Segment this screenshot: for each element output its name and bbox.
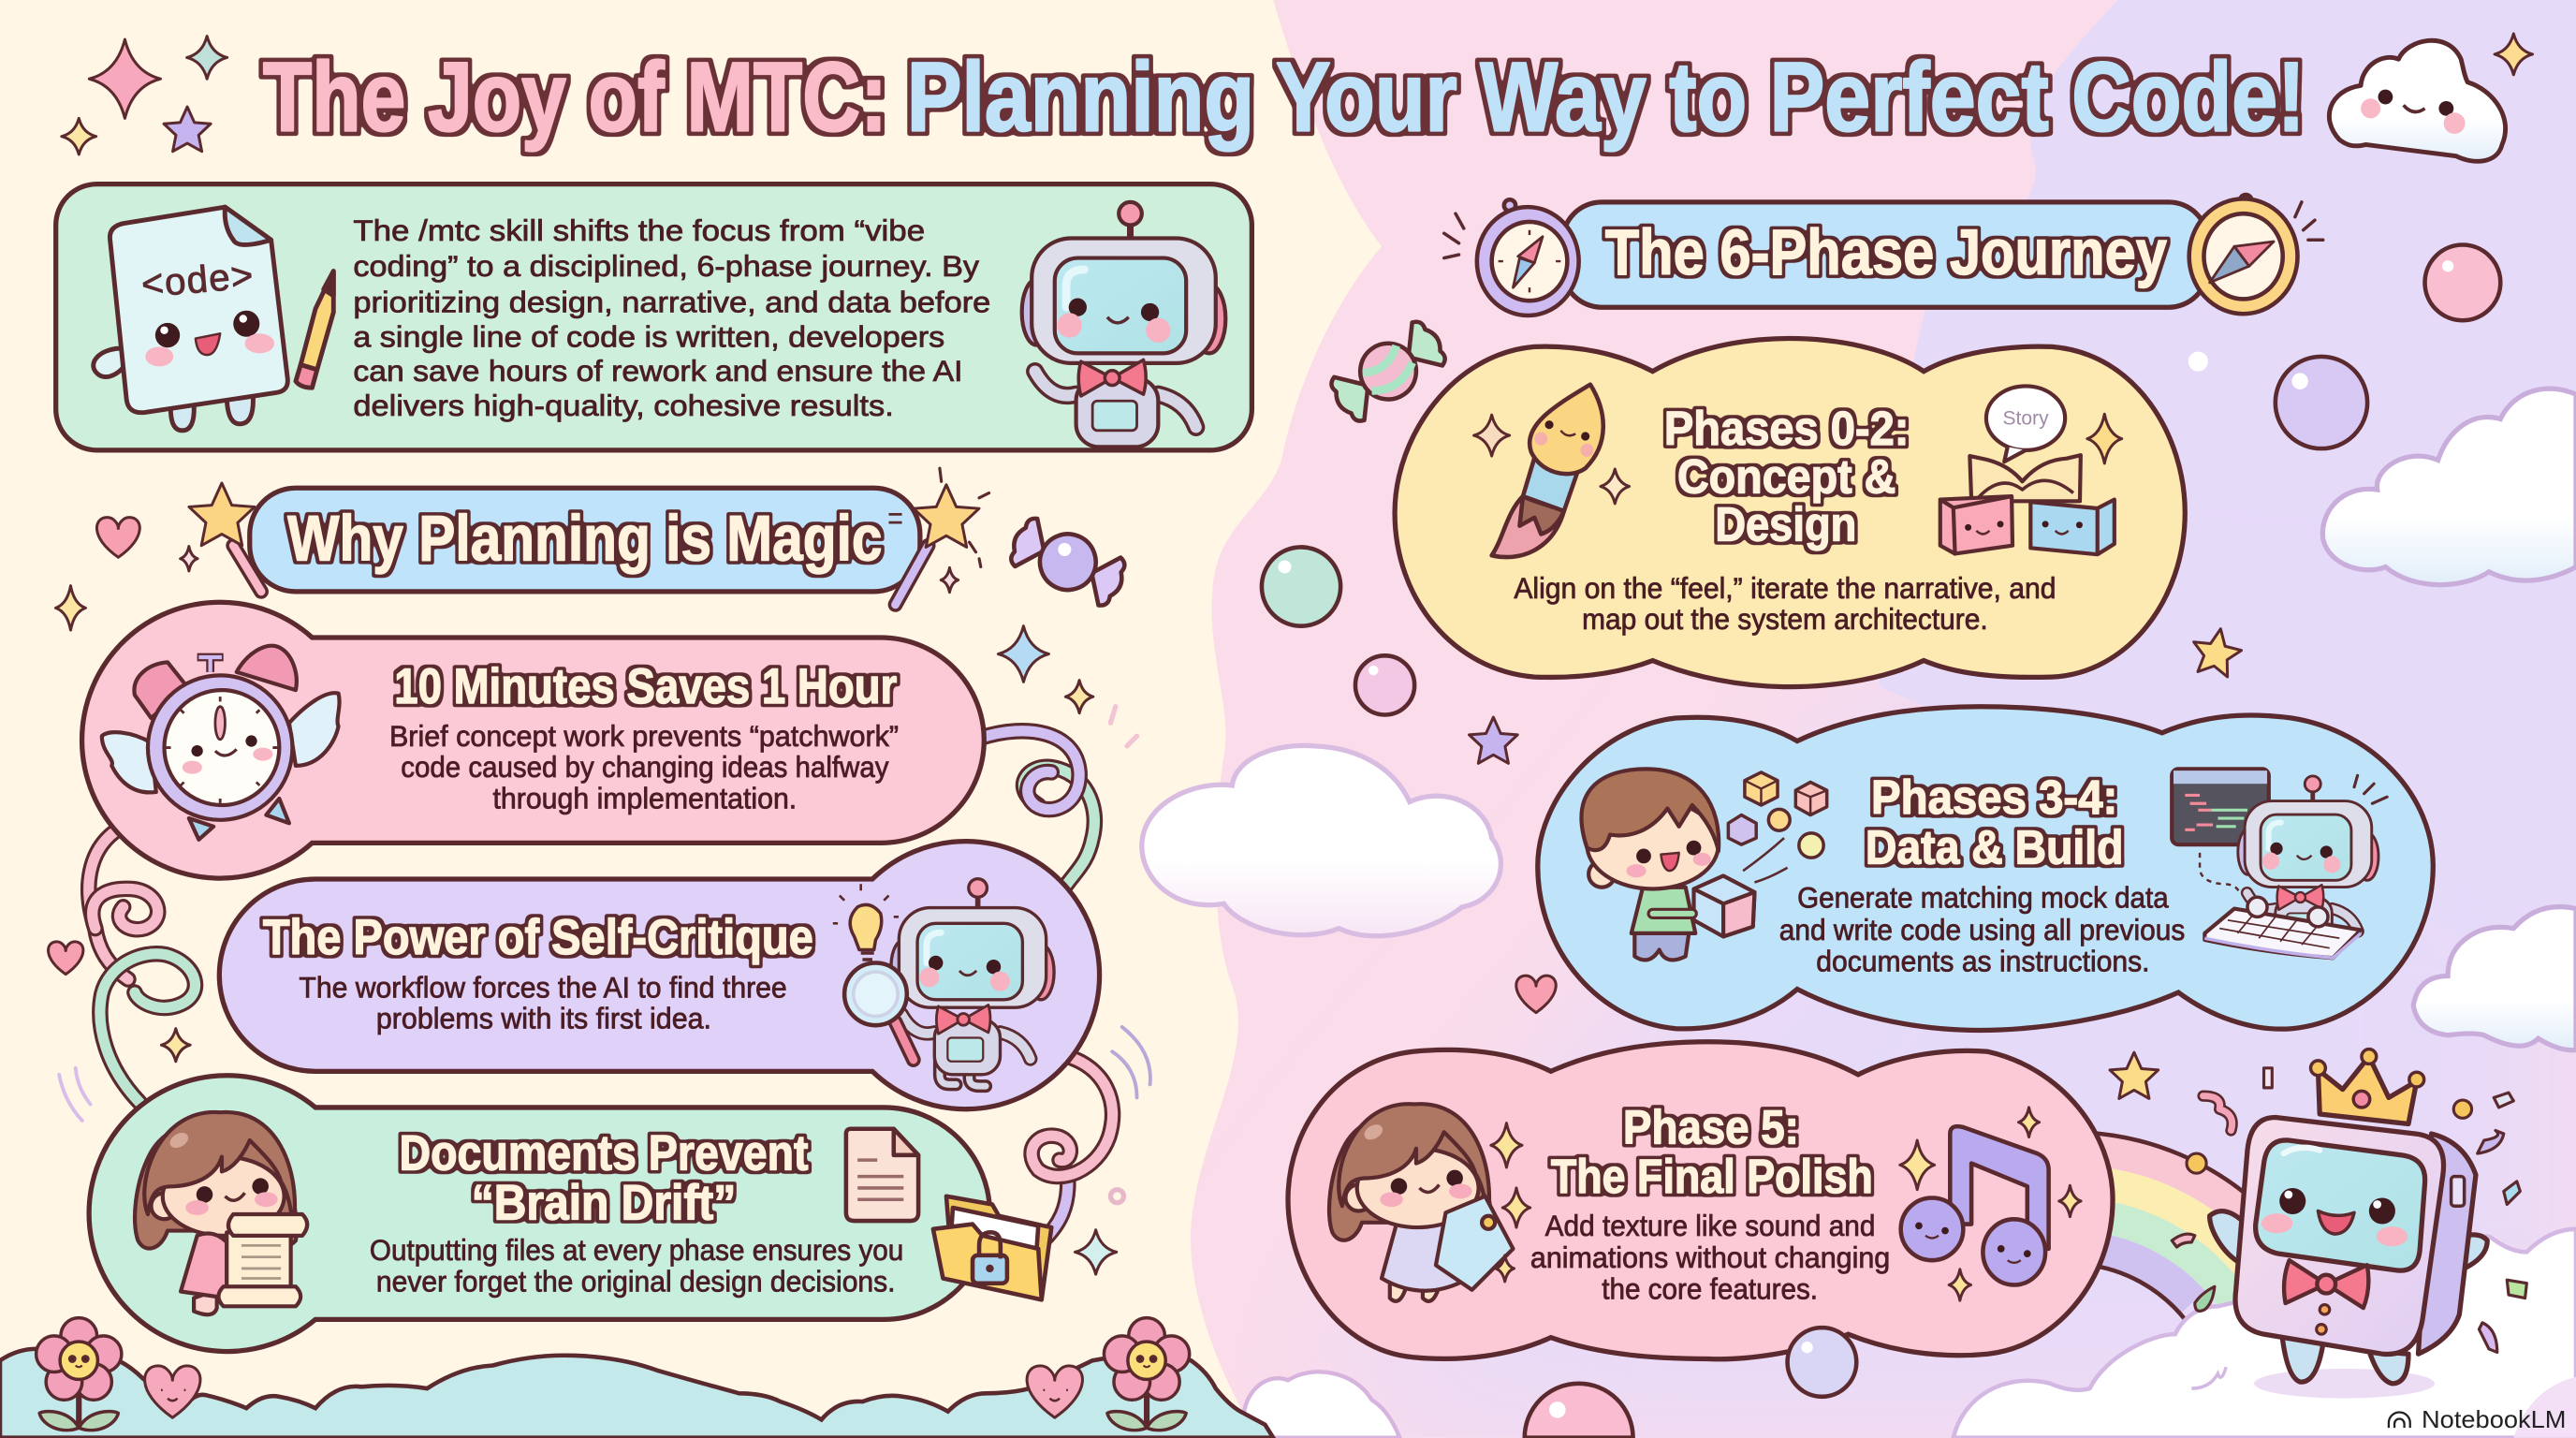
- phase title: [1866, 770, 2123, 873]
- phase title: The Final Polish: [1551, 1150, 1873, 1203]
- card text: Brief concept work prevents “patchwork”: [389, 719, 899, 753]
- title: The Joy of MTC:: [263, 43, 887, 153]
- icon: right flower: [1104, 1318, 1190, 1431]
- decorations: left column: [49, 518, 1150, 1274]
- confetti: [2172, 1068, 2526, 1352]
- heading pill: Why Planning is Magic: Why Planning is Magic: [287, 502, 882, 574]
- icon: robot at keyboard: [2204, 775, 2387, 958]
- panel: 10 Minutes Saves 1 Hour: [82, 602, 984, 878]
- icon: right compass: [2189, 195, 2323, 314]
- icon: document: [846, 1129, 918, 1221]
- icon: left heart: [145, 1366, 200, 1417]
- card text: [389, 719, 899, 815]
- phase text: map out the system architecture.: [1582, 602, 1988, 636]
- white dot: [2188, 352, 2208, 372]
- bubbles: [1262, 245, 2500, 1438]
- phase title: Phase 5:: [1623, 1101, 1799, 1154]
- icon: story book and boxes: Story: [2002, 408, 2049, 430]
- phase title: Design: [1715, 497, 1856, 550]
- phase text: the core features.: [1602, 1271, 1818, 1305]
- phase title: [1551, 1101, 1873, 1203]
- icon: paintbrush: [1474, 385, 1630, 557]
- phase text: animations without changing: [1530, 1240, 1890, 1274]
- cloud: right: [2322, 389, 2576, 585]
- icon: green candy: [1324, 315, 1453, 428]
- rainbow: [2086, 1133, 2259, 1319]
- crown: [2318, 1057, 2417, 1123]
- icon: crowned mascot device: [2172, 1049, 2526, 1399]
- icon: left flower: [37, 1318, 122, 1431]
- phase text: Align on the “feel,” iterate the narrative, and: [1514, 571, 2056, 605]
- card text: Outputting files at every phase ensures you: [370, 1233, 903, 1267]
- heading pill: The 6-Phase Journey: [1562, 202, 2208, 307]
- icon: floating data cubes: [1728, 772, 1827, 882]
- panel: Phases 0-2 Concept and Design: [1395, 339, 2185, 687]
- icon: code document character: <ode>: [139, 253, 255, 306]
- card text: [299, 970, 787, 1035]
- phase title: Concept &: [1677, 450, 1895, 504]
- connector swirls: left column: [89, 731, 1113, 1240]
- intro text: can save hours of rework and ensure the AI: [353, 354, 962, 388]
- phase text: documents as instructions.: [1816, 944, 2150, 977]
- heading pill: Why Planning is Magic: [250, 488, 920, 592]
- card text: code caused by changing ideas halfway: [401, 750, 889, 784]
- cloud: bottom right: [1954, 1229, 2576, 1438]
- icon: lightbulb: [833, 884, 899, 960]
- icon: winged alarm clock: [102, 646, 340, 840]
- icon: robot waving: [1022, 202, 1225, 447]
- card title: Documents Prevent: [399, 1126, 809, 1181]
- icon: story book and boxes: [1940, 386, 2122, 554]
- card title: [399, 1126, 809, 1230]
- panel: Phase 5 The Final Polish: [1288, 1042, 2113, 1359]
- phase text: Generate matching mock data: [1797, 881, 2169, 915]
- icon: left compass: [1444, 199, 1579, 315]
- phase title: [1664, 402, 1909, 550]
- card text: [370, 1233, 903, 1299]
- card title: The Power of Self-Critique: [263, 910, 813, 965]
- intro text: The /mtc skill shifts the focus from “vibe: [353, 213, 925, 247]
- icon: left wand: [189, 483, 261, 592]
- panel: intro: [56, 184, 1251, 450]
- phase text: [1530, 1209, 1890, 1305]
- decorations: title sparkles: [62, 34, 2533, 154]
- icon: smiling cloud: [2329, 40, 2506, 161]
- panel: Documents Prevent Brain Drift: [89, 1076, 1051, 1352]
- intro text: a single line of code is written, developers: [353, 319, 944, 353]
- icon: boy with data cube: [1582, 769, 1754, 960]
- bottom hills: [0, 1349, 1273, 1438]
- icon: girl with scroll: [135, 1112, 307, 1314]
- icon: purple candy: [1004, 512, 1132, 611]
- bubble over Phase 5 panel: [1788, 1328, 1856, 1397]
- icon: code terminal window: [2172, 769, 2269, 892]
- card text: problems with its first idea.: [376, 1002, 711, 1035]
- phase text: Add texture like sound and: [1545, 1209, 1875, 1242]
- card text: through implementation.: [493, 782, 797, 815]
- intro text: coding” to a disciplined, 6-phase journey. By: [353, 249, 979, 283]
- heading pill: The 6-Phase Journey: The 6-Phase Journey: [1605, 216, 2167, 288]
- icon: girl with pillow: [1329, 1104, 1530, 1301]
- icon: robot with magnifier: [844, 879, 1054, 1086]
- title: [263, 43, 2305, 153]
- cloud: centre: [1142, 745, 1500, 936]
- phase text: and write code using all previous: [1779, 913, 2185, 946]
- phase title: Phases 3-4:: [1871, 770, 2117, 824]
- icon: right wand: [896, 468, 989, 605]
- phase text: [1779, 881, 2185, 977]
- title: Planning Your Way to Perfect Code!: [907, 43, 2305, 153]
- NotebookLM watermark: NotebookLM: [2422, 1407, 2566, 1433]
- icon: code document character: [94, 207, 333, 431]
- card title: “Brain Drift”: [472, 1175, 736, 1230]
- intro text: [353, 213, 990, 422]
- intro text: delivers high-quality, cohesive results.: [353, 389, 894, 422]
- decorations: right column: [1470, 624, 2245, 1098]
- card text: The workflow forces the AI to find three: [299, 970, 787, 1004]
- card title: 10 Minutes Saves 1 Hour: [394, 659, 897, 714]
- cloud: bottom centre: [1243, 1372, 1399, 1438]
- intro text: prioritizing design, narrative, and data before: [353, 285, 990, 318]
- card text: never forget the original design decisions.: [376, 1265, 896, 1299]
- icon: music note: [1900, 1108, 2081, 1300]
- phase title: Phases 0-2:: [1664, 402, 1909, 455]
- icon: locked folder: [933, 1196, 1051, 1299]
- phase text: [1514, 571, 2056, 636]
- phase title: Data & Build: [1866, 820, 2123, 873]
- panel: Phases 3-4 Data and Build: [1538, 707, 2433, 1030]
- cloud: lower right: [2413, 907, 2576, 1050]
- panel: The Power of Self-Critique: [219, 842, 1100, 1109]
- icon: right heart: [1027, 1366, 1082, 1417]
